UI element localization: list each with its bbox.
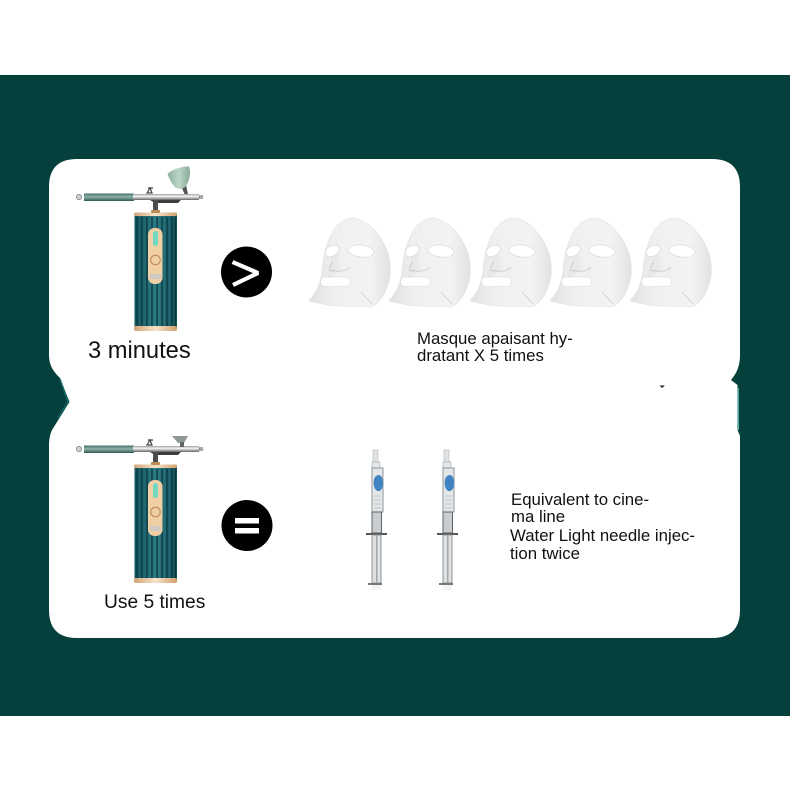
icon: airbrush device, top row xyxy=(76,166,204,331)
text: equivalence: tion twice xyxy=(510,544,580,563)
icon: five sheet masks xyxy=(309,218,711,307)
label: use 5 times: Use 5 times xyxy=(104,592,205,613)
text: mask comparison: dratant X 5 times xyxy=(417,346,544,365)
text: equivalence: ma line xyxy=(511,507,565,526)
text: equivalence: Water Light needle injec- xyxy=(510,526,695,545)
icon: teal notch glow right xyxy=(737,388,739,430)
icon: equals badge xyxy=(222,500,272,551)
text: equivalence: Equivalent to cine- xyxy=(511,490,649,509)
icon: teal notch glow left xyxy=(58,379,68,418)
text: mask comparison: Masque apaisant hy- xyxy=(417,329,573,348)
label: 3 minutes: 3 minutes xyxy=(88,338,191,364)
icon: airbrush device, bottom row xyxy=(76,436,204,583)
icon: greater-than badge xyxy=(221,246,272,298)
icon: two syringes xyxy=(366,450,458,590)
panel: white comparison card xyxy=(49,159,740,638)
icon: small dark mark xyxy=(660,386,665,388)
